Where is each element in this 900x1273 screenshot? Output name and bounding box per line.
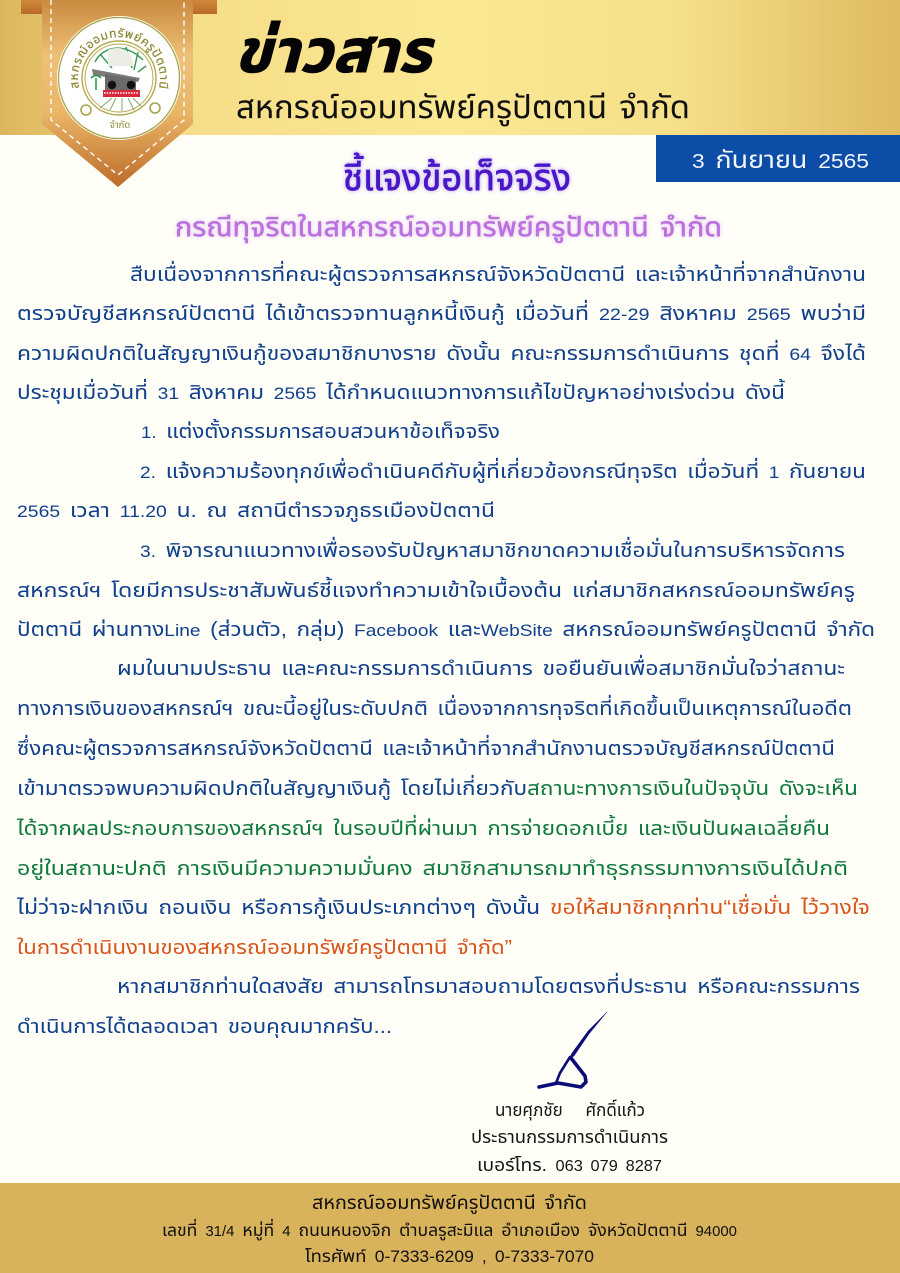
main heading: ชี้แจงข้อเท็จจริง — [343, 152, 571, 198]
sub heading: กรณีทุจริตในสหกรณ์ออมทรัพย์ครูปัตตานี จำกัด — [175, 212, 722, 243]
body text: opening paragraph — [17, 260, 866, 404]
header band — [0, 0, 900, 135]
body text: numbered actions: 3. พิจารณาแนวทางเพื่อรองรับปัญหาสมาชิกขาดความเชื่อมั่นในการบริหารจัดการ — [140, 536, 845, 562]
body text: opening paragraph: ประชุมเมื่อวันที่ 31 สิงหาคม 2565 ได้กำหนดแนวทางการแก้ไขปัญหาอย่างเร่งด่วน ดังนี้ — [17, 378, 785, 404]
body text: chairman's reassurance: ได้จากผลประกอบการของสหกรณ์ฯ ในรอบปีที่ผ่านมา การจ่ายดอกเบี้ย และเงินปันผลเฉลี่ยคืน — [16, 814, 830, 840]
body text: numbered actions: 2. แจ้งความร้องทุกข์เพื่อดำเนินคดีกับผู้ที่เกี่ยวข้องกรณีทุจริต เมื่อวันที่ 1 กันยายน — [140, 457, 866, 484]
signatory block: นายศุภชัย ศักดิ์แก้ว — [495, 1099, 645, 1121]
ribbon badge with cooperative seal — [21, 0, 217, 187]
body text: opening paragraph: ตรวจบัญชีสหกรณ์ปัตตานี ได้เข้าตรวจทานลูกหนี้เงินกู้ เมื่อวันที่ 22-29 สิงหาคม 2565 พบว่ามี — [17, 299, 866, 326]
body text: closing paragraph: หากสมาชิกท่านใดสงสัย สามารถโทรมาสอบถามโดยตรงที่ประธาน หรือคณะกรรมการ — [117, 972, 860, 998]
signatory block — [471, 1099, 668, 1175]
body text: opening paragraph: ความผิดปกติในสัญญาเงินกู้ของสมาชิกบางราย ดังนั้น คณะกรรมการดำเนินการ ชุดที่ 64 จึงได้ — [17, 339, 866, 366]
body text: chairman's reassurance: ในการดำเนินงานของสหกรณ์ออมทรัพย์ครูปัตตานี จำกัด” — [17, 937, 512, 960]
signatory block: เบอร์โทร. 063 079 8287 — [477, 1155, 662, 1175]
body text: opening paragraph: สืบเนื่องจากการที่คณะผู้ตรวจการสหกรณ์จังหวัดปัตตานี และเจ้าหน้าที่จากสำนักงาน — [130, 260, 866, 287]
footer: cooperative name: สหกรณ์ออมทรัพย์ครูปัตตานี จำกัด — [312, 1193, 587, 1215]
footer: address: เลขที่ 31/4 หมู่ที่ 4 ถนนหนองจิก ตำบลรูสะมิแล อำเภอเมือง จังหวัดปัตตานี 94000 — [162, 1218, 737, 1242]
body text: chairman's reassurance: อยู่ในสถานะปกติ การเงินมีความความมั่นคง สมาชิกสามารถมาทำธุรกรรมทางการเงินได้ปกติ — [17, 855, 848, 881]
icon: cooperative seal — [57, 16, 181, 140]
body text: numbered actions: 2565 เวลา 11.20 น. ณ สถานีตำรวจภูธรเมืองปัตตานี — [17, 500, 495, 523]
body text: numbered actions — [17, 418, 875, 642]
icon: cooperative seal: สหกรณ์ออมทรัพย์ครูปัตตานี — [71, 28, 169, 89]
body text: chairman's reassurance: ซึ่งคณะผู้ตรวจการสหกรณ์จังหวัดปัตตานี และเจ้าหน้าที่จากสำนักงานตรวจบัญชีสหกรณ์ปัตตานี — [17, 734, 835, 761]
body text: chairman's reassurance: เข้ามาตรวจพบความผิดปกติในสัญญาเงินกู้ โดยไม่เกี่ยวกับ สถานะทางการเงินในปัจจุบัน ดังจะเห็น — [17, 774, 858, 801]
main heading: ชี้แจงข้อเท็จจริง — [343, 152, 571, 198]
body text: chairman's reassurance: ไม่ว่าจะฝากเงิน ถอนเงิน หรือการกู้เงินประเภทต่างๆ ดังนั้น ขอให้สมาชิกทุกท่าน“เชื่อมั่น ไว้วางใจ — [16, 893, 870, 920]
body text: numbered actions: สหกรณ์ฯ โดยมีการประชาสัมพันธ์ชี้แจงทำความเข้าใจเบื้องต้น แก่สมาชิกสหกรณ์ออมทรัพย์ครู — [17, 576, 855, 603]
subtitle: cooperative name: สหกรณ์ออมทรัพย์ครูปัตตานี จำกัด — [236, 89, 690, 127]
body text: closing paragraph — [17, 972, 860, 1038]
title: ข่าวสาร — [234, 18, 435, 85]
footer: phone numbers: โทรศัพท์ 0-7333-6209 , 0-7333-7070 — [305, 1247, 594, 1266]
body text: chairman's reassurance: ผมในนามประธาน และคณะกรรมการดำเนินการ ขอยืนยันเพื่อสมาชิกมั่นใจว่าสถานะ — [117, 654, 845, 680]
sub heading: กรณีทุจริตในสหกรณ์ออมทรัพย์ครูปัตตานี จำกัด — [175, 212, 722, 243]
body text: chairman's reassurance: ทางการเงินของสหกรณ์ฯ ขณะนี้อยู่ในระดับปกติ เนื่องจากการทุจริตที่เกิดขึ้นเป็นเหตุการณ์ในอดีต — [17, 694, 852, 721]
body text: numbered actions: ปัตตานี ผ่านทาง Line (ส่วนตัว, กลุ่ม) Facebook และ WebSite สหกรณ์ออมทรัพย์ครูปัตตานี จำกัด — [17, 618, 875, 642]
signatory block: ประธานกรรมการดำเนินการ — [471, 1127, 668, 1147]
icon: cooperative seal: จำกัด — [110, 120, 130, 131]
body text: closing paragraph: ดำเนินการได้ตลอดเวลา ขอบคุณมากครับ... — [17, 1015, 392, 1038]
signature — [539, 1012, 607, 1087]
date box: 3 กันยายน 2565 — [692, 147, 869, 174]
body text: numbered actions: 1. แต่งตั้งกรรมการสอบสวนหาข้อเท็จจริง — [141, 418, 500, 443]
footer band — [0, 1183, 900, 1273]
date box — [656, 135, 900, 182]
body text: chairman's reassurance — [16, 654, 870, 960]
